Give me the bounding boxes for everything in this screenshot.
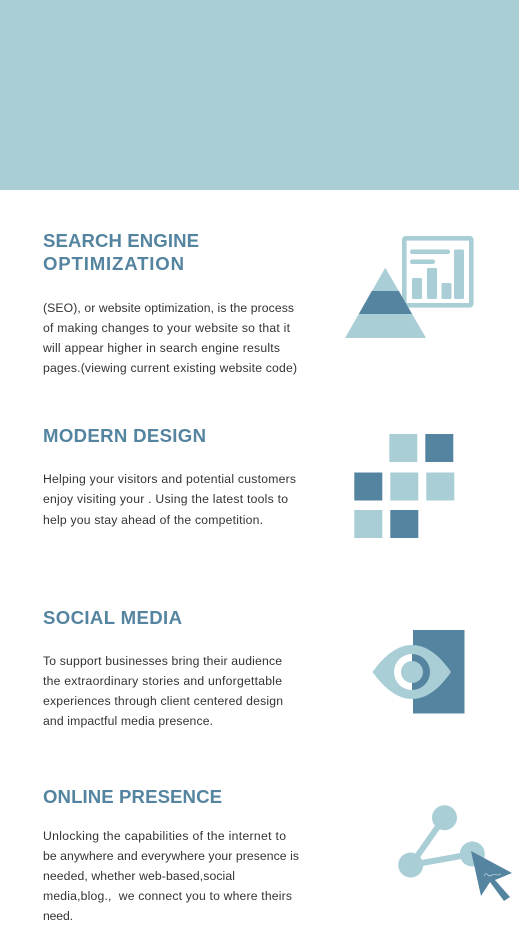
- text block: seo description: will appear higher in search engine results: [42, 341, 280, 355]
- text block: social media description: To support businesses bring their audience: [43, 654, 282, 668]
- text block: seo description: [42, 301, 297, 375]
- section: social media: [43, 607, 464, 728]
- heading: search engine optimization: OPTIMIZATION: [43, 253, 184, 274]
- header banner: [0, 0, 519, 190]
- text block: online presence description: [43, 829, 299, 923]
- heading: online presence: ONLINE PRESENCE: [43, 786, 222, 807]
- icon: square grid: [354, 434, 454, 538]
- text block: seo description: pages.(viewing current existing website code): [43, 361, 297, 375]
- text block: social media description: experiences through client centered design: [43, 694, 283, 708]
- text block: social media description: the extraordinary stories and unforgettable: [43, 674, 282, 688]
- heading: modern design: MODERN DESIGN: [43, 425, 206, 446]
- text block: seo description: of making changes to your website so that it: [43, 321, 291, 335]
- text block: online presence description: Unlocking the capabilities of the internet to: [43, 829, 286, 843]
- icon: eye: [372, 630, 464, 714]
- heading: social media: SOCIAL MEDIA: [43, 607, 182, 628]
- text block: social media description: and impactful media presence.: [43, 714, 213, 728]
- text block: modern design description: enjoy visiting your . Using the latest tools to: [43, 492, 288, 506]
- text block: modern design description: Helping your visitors and potential customers: [43, 472, 296, 486]
- text block: online presence description: needed, whether web-based,social: [43, 869, 235, 883]
- section: online presence: [43, 786, 512, 923]
- heading: search engine optimization: [43, 230, 199, 274]
- text block: online presence description: need.: [43, 909, 73, 923]
- text block: modern design description: help you stay ahead of the competition.: [43, 513, 263, 527]
- text block: social media description: [43, 654, 283, 728]
- section: search engine optimization: [42, 230, 471, 375]
- icon: network with cursor: [398, 805, 512, 901]
- text block: seo description: (SEO), or website optimization, is the process: [43, 301, 294, 315]
- heading: search engine optimization: SEARCH ENGINE: [43, 230, 199, 251]
- text block: online presence description: media,blog., we connect you to where theirs: [43, 889, 292, 903]
- text block: online presence description: be anywhere and everywhere your presence is: [43, 849, 299, 863]
- icon: pyramid and bar chart report: [345, 238, 471, 338]
- text block: modern design description: [43, 472, 296, 527]
- section: modern design: [43, 425, 454, 538]
